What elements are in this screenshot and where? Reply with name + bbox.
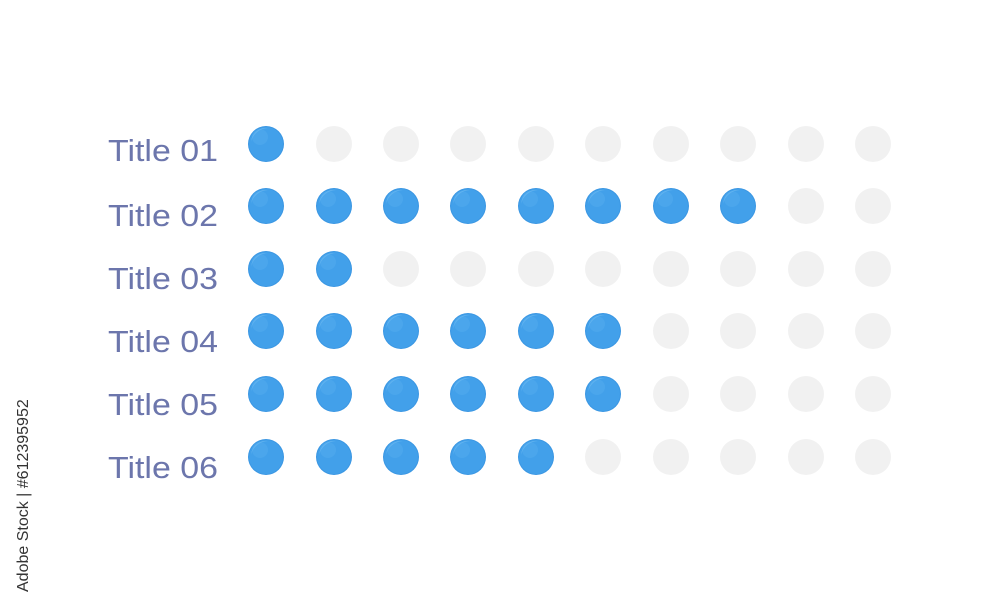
label 5: Title 05 xyxy=(108,387,218,422)
label 6: Title 06 xyxy=(108,450,218,485)
row 3 xyxy=(108,251,891,296)
label 3: Title 03 xyxy=(108,261,218,296)
row 6 xyxy=(108,439,891,485)
row 4 xyxy=(108,313,891,359)
label 4: Title 04 xyxy=(108,324,218,359)
label 1: Title 01 xyxy=(108,133,218,168)
row 5 xyxy=(108,376,891,422)
row 1 xyxy=(108,126,891,168)
credit text: Adobe Stock | #612395952 xyxy=(15,399,32,592)
row 2 xyxy=(108,188,891,233)
label 2: Title 02 xyxy=(108,198,218,233)
